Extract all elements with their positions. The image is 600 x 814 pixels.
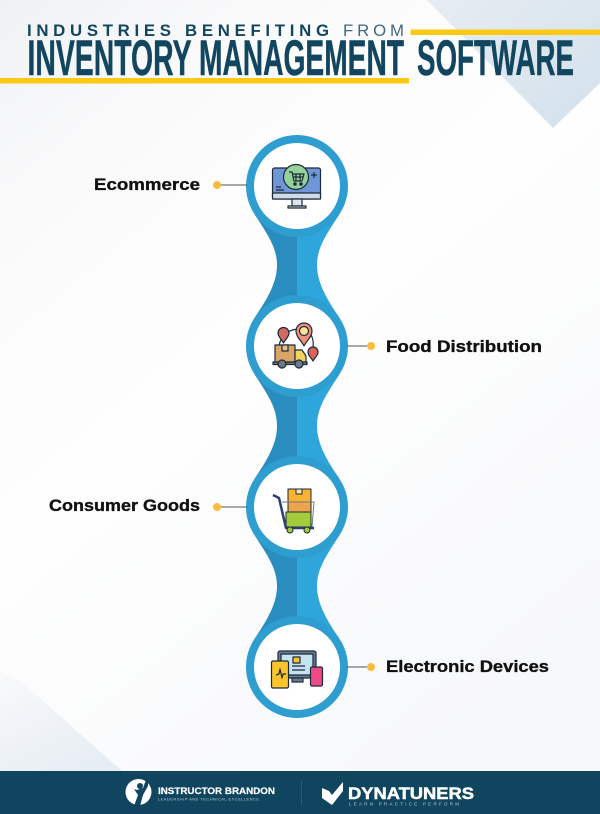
connector dot (367, 663, 375, 671)
main title: MANAGEMENT (199, 30, 404, 86)
connector dot (367, 342, 375, 350)
title (0, 21, 600, 86)
main title (28, 30, 574, 86)
node: electronic devices (250, 620, 344, 714)
icon: computer with cart (272, 164, 320, 208)
node: ecommerce (250, 139, 344, 233)
logo: dynatuners (322, 782, 474, 806)
logo: instructor brandon: LEADERSHIP AND TECHNICAL EXCELLENCE (158, 796, 259, 802)
logo: dynatuners: LEARN PRACTICE PERFORM (349, 802, 459, 806)
footer (0, 771, 600, 814)
connector dot (213, 503, 221, 511)
connector dot (213, 181, 221, 189)
label: electronic devices: Electronic Devices (386, 657, 549, 676)
label: food distribution: Food Distribution (386, 337, 542, 356)
node: consumer goods (250, 460, 344, 554)
icon: check mark (322, 782, 343, 805)
label: consumer goods: Consumer Goods (49, 496, 200, 515)
logo: instructor brandon (126, 777, 275, 806)
icon: delivery truck with pins (273, 323, 318, 368)
node: food distribution (250, 299, 344, 393)
logo: instructor brandon: INSTRUCTOR BRANDON (158, 786, 275, 797)
label: ecommerce (94, 175, 247, 194)
icon: instructor brandon mark (126, 777, 152, 806)
yellow bar bottom (0, 78, 409, 84)
chain connector (255, 205, 339, 650)
subtitle: industries benefiting from: INDUSTRIES BENEFITING (27, 21, 329, 40)
logo: dynatuners: DYNATUNERS (348, 784, 474, 803)
main title: INVENTORY (28, 30, 192, 86)
icon: monitor, phone and tablet (272, 651, 322, 688)
icon: shopping cart with boxes (273, 489, 314, 533)
label: ecommerce: Ecommerce (94, 175, 200, 194)
subtitle: industries benefiting from: FROM (343, 21, 404, 40)
yellow bar top (410, 30, 600, 35)
